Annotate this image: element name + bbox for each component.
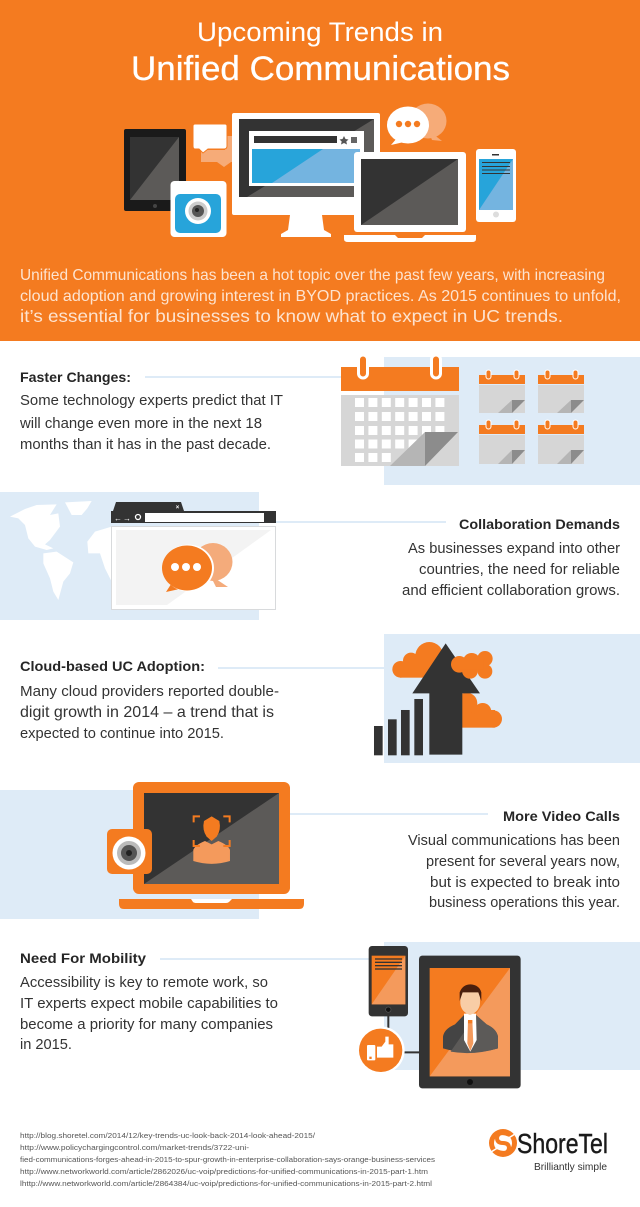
text: need for mobility: IT experts expect mobile capabilities to: [20, 995, 278, 1012]
icon: large calendar: [341, 355, 459, 466]
text: faster changes: [19, 392, 283, 453]
title: Unified Communications: [131, 50, 510, 88]
icon: logo mark: [489, 1129, 517, 1157]
intro text: Unified Communications has been a hot topic over the past few years, with increasing: [20, 267, 605, 284]
panel: more video calls: [0, 782, 620, 919]
text: cloud-based UC adoption: Many cloud providers reported double-: [20, 683, 279, 700]
panel: cloud-based UC adoption: [20, 634, 640, 763]
icon: clouds, growth bars and arrow: [374, 642, 502, 755]
panel: collaboration demands: [0, 492, 620, 620]
intro text: [20, 267, 621, 326]
text: need for mobility: in 2015.: [20, 1036, 72, 1053]
icon: smartphone: [476, 149, 516, 222]
icon: orange-backed chat bubbles: [387, 104, 446, 145]
icon: connected devices: [357, 946, 521, 1088]
text: cloud-based UC adoption: digit growth in 2014 – a trend that is: [20, 704, 274, 721]
icon: phone: [369, 946, 408, 1016]
text: cloud-based UC adoption: expected to continue into 2015.: [20, 725, 224, 742]
heading: need for mobility: Need For Mobility: [20, 950, 146, 966]
logo: ShoreTel: Brilliantly simple: [534, 1161, 607, 1173]
panel: orange header: [0, 0, 640, 341]
text: source links: http://www.policychargingcontrol.com/market-trends/3722-uni-: [20, 1143, 250, 1152]
icon: person in focus frame: [193, 816, 230, 864]
text: need for mobility: become a priority for many companies: [20, 1016, 273, 1033]
icon: webcam: [107, 829, 152, 874]
icon: tablet: [124, 129, 186, 211]
icon: webcam: [170, 181, 226, 237]
text: collaboration demands: [402, 540, 620, 599]
text: more video calls: present for several years now,: [426, 853, 620, 870]
text: collaboration demands: countries, the need for reliable: [419, 561, 620, 578]
heading: faster changes: Faster Changes:: [20, 369, 131, 385]
panel: faster changes: [19, 355, 640, 485]
text: source links: http://blog.shoretel.com/2014/12/key-trends-uc-look-back-2014-look-ahead-2015/: [20, 1131, 316, 1140]
icon: thumbs up badge: [357, 1026, 405, 1074]
icon: small chat bubbles: [193, 124, 236, 167]
text: more video calls: business operations this year.: [429, 894, 620, 911]
text: faster changes: will change even more in the next 18: [19, 415, 262, 432]
text: faster changes: months than it has in the past decade.: [20, 436, 271, 453]
panel: need for mobility: [20, 942, 640, 1088]
chart: world map: [10, 501, 112, 600]
text: collaboration demands: As businesses expand into other: [408, 540, 620, 557]
icon: laptop with video call: [119, 782, 304, 909]
text: collaboration demands: and efficient collaboration grows.: [402, 582, 620, 599]
icon: browser window: ×: [176, 505, 180, 511]
icon: chat bubbles: [162, 543, 232, 592]
heading: cloud-based UC adoption: Cloud-based UC Adoption:: [20, 658, 205, 674]
icon: tablet with businessman: [419, 956, 521, 1088]
title: Upcoming Trends in: [197, 17, 443, 47]
text: faster changes: Some technology experts predict that IT: [20, 392, 283, 409]
icon: laptop: [344, 152, 476, 242]
icon: browser window: [111, 502, 276, 610]
text: source links: http://www.networkworld.com/article/2862026/uc-voip/predictions-for-unified-communications-in-2015-part-1.htm: [20, 1167, 428, 1176]
text: source links: [20, 1131, 435, 1188]
icon: browser window: ←: [114, 514, 122, 523]
heading: more video calls: More Video Calls: [503, 808, 620, 824]
text: more video calls: but is expected to break into: [430, 874, 620, 891]
text: more video calls: Visual communications has been: [408, 832, 620, 849]
icon: browser window: →: [123, 514, 131, 523]
text: need for mobility: Accessibility is key to remote work, so: [20, 974, 268, 991]
title: [131, 17, 510, 88]
intro text: cloud adoption and growing interest in BYOD practices. As 2015 continues to unfold,: [20, 288, 621, 305]
text: need for mobility: [20, 974, 278, 1053]
text: cloud-based UC adoption: [20, 683, 279, 742]
icon: desktop monitor: [232, 113, 380, 237]
icon: small calendars: [479, 370, 584, 464]
intro text: it’s essential for businesses to know what to expect in UC trends.: [20, 306, 563, 326]
text: more video calls: [408, 832, 620, 911]
logo: ShoreTel: [489, 1128, 608, 1173]
logo: ShoreTel: ShoreTel: [517, 1128, 608, 1159]
text: source links: lhttp://www.networkworld.com/article/2864384/uc-voip/predictions-for-unified-communications-in-2015-part-2.html: [20, 1179, 432, 1188]
heading: collaboration demands: Collaboration Demands: [459, 516, 620, 532]
text: source links: fied-communications-forges-ahead-in-2015-to-spur-growth-in-enterprise-collaboration-says-orange-business-services: [20, 1155, 435, 1164]
